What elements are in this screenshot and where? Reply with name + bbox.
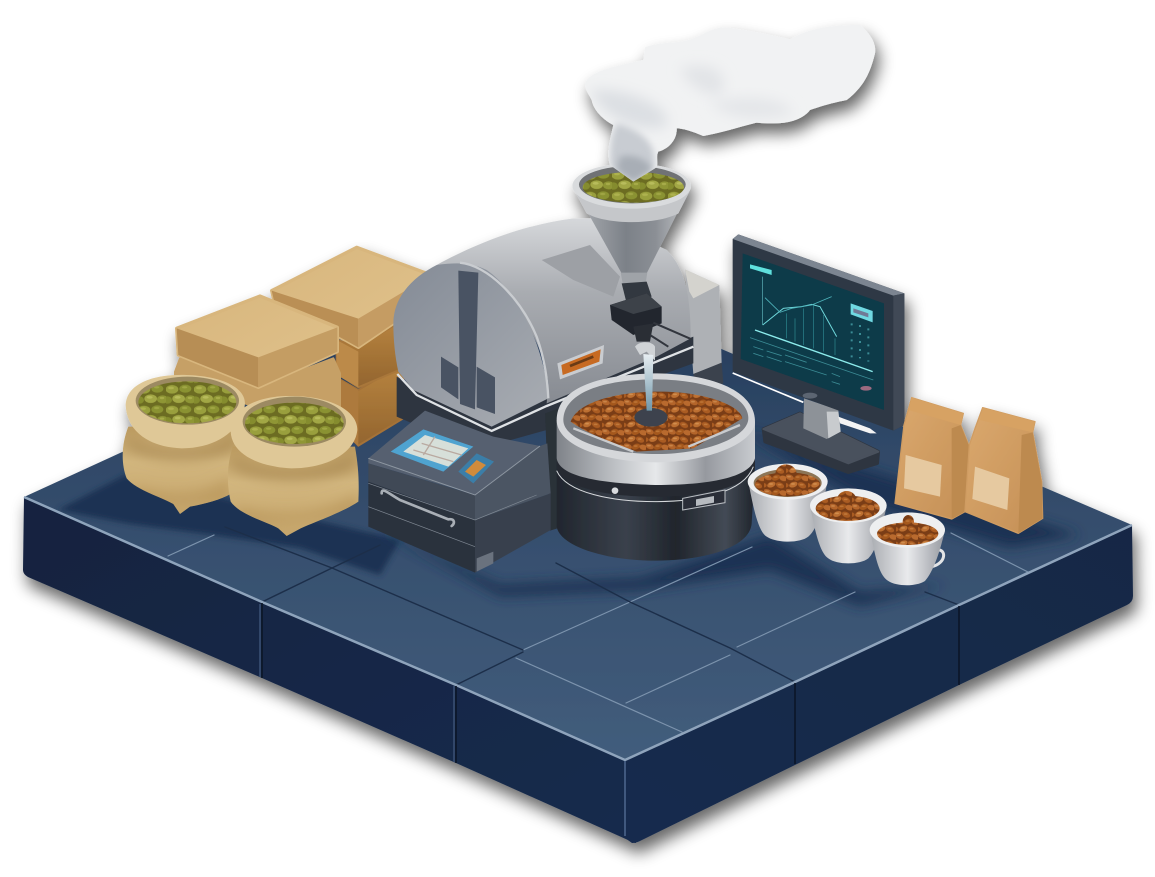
left stack, lower block xyxy=(175,358,340,407)
bin latch xyxy=(683,490,725,510)
drum face slot xyxy=(441,271,495,414)
cup 2 xyxy=(810,488,887,563)
lower body xyxy=(397,337,693,450)
right stack, middle block xyxy=(337,320,403,387)
monitor screen xyxy=(741,253,884,410)
drum face rim xyxy=(460,263,548,398)
spout and bean stream xyxy=(635,342,655,411)
drum flange xyxy=(397,347,693,431)
bin interior xyxy=(563,379,748,454)
steam cloud xyxy=(585,25,875,183)
control console xyxy=(368,411,551,573)
platform edge highlights xyxy=(24,497,1132,760)
platform top surface xyxy=(24,266,1132,760)
right stack, top block xyxy=(272,247,425,347)
bag 1 xyxy=(895,398,969,519)
monitor xyxy=(733,234,904,472)
valve assembly xyxy=(610,282,692,347)
platform seam bevels xyxy=(260,604,454,762)
bin base pot xyxy=(557,465,755,561)
hopper xyxy=(572,163,691,287)
coffee bags xyxy=(895,398,1043,533)
roasted beans xyxy=(571,392,742,452)
monitor logo xyxy=(803,393,817,399)
drum barrel xyxy=(437,218,691,403)
drum face xyxy=(393,263,548,427)
floor shadows under equipment xyxy=(58,430,1080,606)
console screen xyxy=(391,429,494,483)
floor seams xyxy=(168,510,1028,732)
bag 2 xyxy=(965,408,1043,533)
stirring arms xyxy=(573,425,740,452)
coffee cups xyxy=(748,464,945,585)
platform block seams xyxy=(262,603,959,764)
rear housing xyxy=(685,269,723,390)
centre column between console and bin xyxy=(545,407,563,531)
open sacks of green beans xyxy=(123,375,359,536)
badge xyxy=(557,345,604,379)
sack 2 xyxy=(228,396,359,536)
monitor body xyxy=(733,234,904,431)
bin wall xyxy=(557,420,755,493)
platform left side xyxy=(23,497,636,843)
sack 1 xyxy=(123,375,245,514)
platform xyxy=(23,266,1133,843)
burlap block sacks xyxy=(175,247,425,446)
roasting machine xyxy=(368,163,755,573)
bin rim xyxy=(557,373,755,462)
centre hub xyxy=(634,408,668,427)
platform front corner edge xyxy=(624,761,626,836)
platform right side xyxy=(625,525,1133,843)
console handle xyxy=(382,491,454,526)
cup 1 xyxy=(748,464,828,542)
cup 3 xyxy=(870,512,945,585)
right stack, bottom block xyxy=(341,363,403,446)
hopper shadow on drum xyxy=(542,245,620,297)
roast bin xyxy=(557,373,755,561)
left stack, top block xyxy=(177,296,337,387)
monitor stand xyxy=(763,398,878,472)
